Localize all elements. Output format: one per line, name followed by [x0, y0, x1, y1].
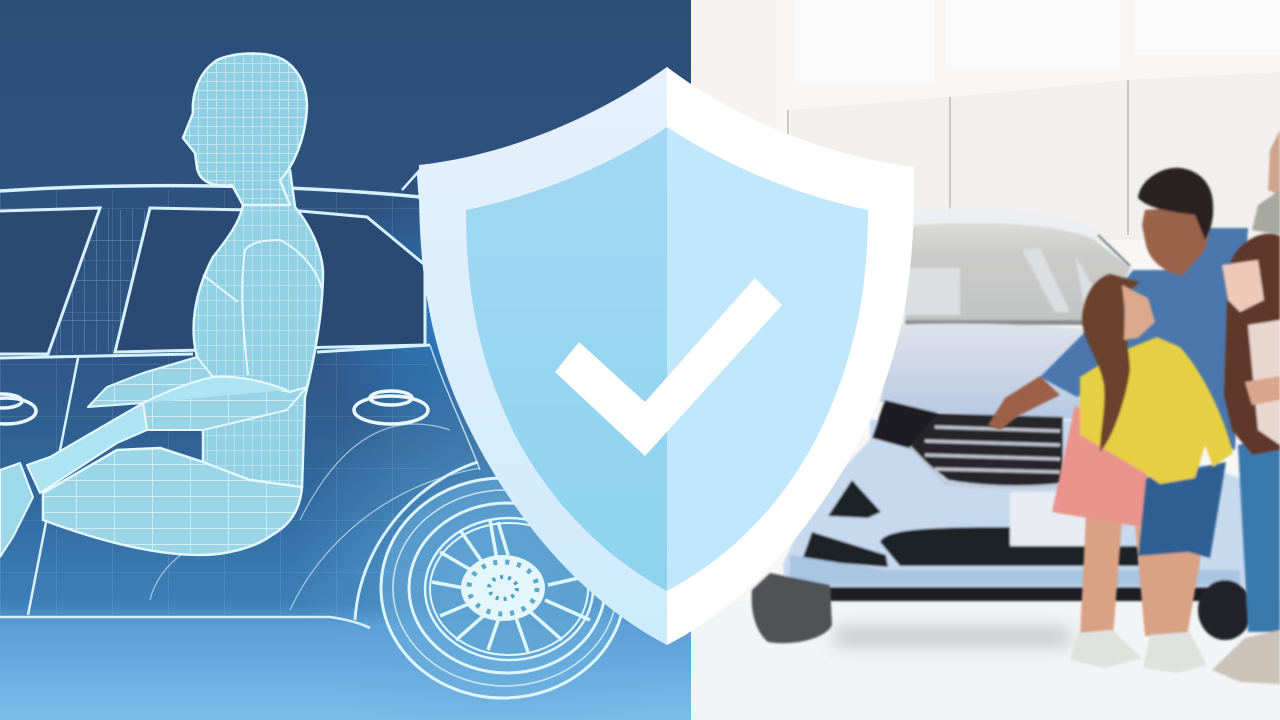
under bumper: [825, 587, 1235, 601]
shield outer left: [419, 67, 667, 645]
shirt: [1040, 228, 1248, 450]
girl in yellow: [1052, 274, 1233, 673]
wheel wireframe: [381, 478, 625, 698]
forearm: [88, 357, 307, 430]
shoes: [1212, 630, 1280, 684]
jeans: [1238, 435, 1280, 632]
head: [183, 54, 307, 205]
car roof: [900, 208, 1145, 325]
plate: [1010, 492, 1087, 546]
shorts: [1138, 462, 1226, 558]
panel: showroom car: [752, 208, 1252, 643]
head: [1142, 205, 1209, 276]
panel: showroom background: [691, 0, 1280, 720]
thigh: [43, 448, 302, 555]
top: [1248, 320, 1280, 445]
icon: door handle left: [0, 394, 36, 424]
front wheel: [752, 573, 832, 643]
shield outer right: [667, 67, 914, 645]
shoulder seam: [203, 240, 322, 375]
hair: [1138, 168, 1213, 240]
icon: check mark: [555, 278, 782, 456]
car wireframe: [0, 172, 480, 628]
hand: [1245, 376, 1280, 405]
icon: safety shield: [419, 67, 914, 645]
headlight: [872, 400, 938, 448]
jacket: [1080, 337, 1233, 484]
car bumper: [783, 420, 1245, 587]
second child at edge: [1212, 234, 1280, 684]
legs: [1080, 515, 1202, 636]
shield inner right: [667, 127, 868, 591]
bumper lip: [790, 555, 1240, 585]
windshield: [905, 223, 1130, 322]
grandparent at edge: [1252, 130, 1280, 235]
father: [988, 168, 1248, 450]
car hood: [880, 324, 1110, 420]
rear wheel: [1198, 580, 1252, 640]
face: [1222, 260, 1264, 312]
neck and torso: [194, 170, 323, 520]
forearm band: [27, 377, 287, 493]
shield inner left: [466, 127, 667, 591]
hair: [1082, 274, 1140, 452]
knee: [0, 463, 33, 557]
face: [1122, 285, 1155, 340]
panel: blueprint background: [0, 0, 691, 720]
icon: door handle right: [354, 391, 428, 424]
skirt: [1052, 405, 1148, 528]
shoes: [1070, 630, 1207, 673]
arm: [988, 376, 1060, 430]
grille: [905, 413, 1063, 486]
fog and intake: [802, 480, 1140, 567]
hair: [1224, 234, 1280, 455]
wireframe person figure: [0, 54, 323, 557]
